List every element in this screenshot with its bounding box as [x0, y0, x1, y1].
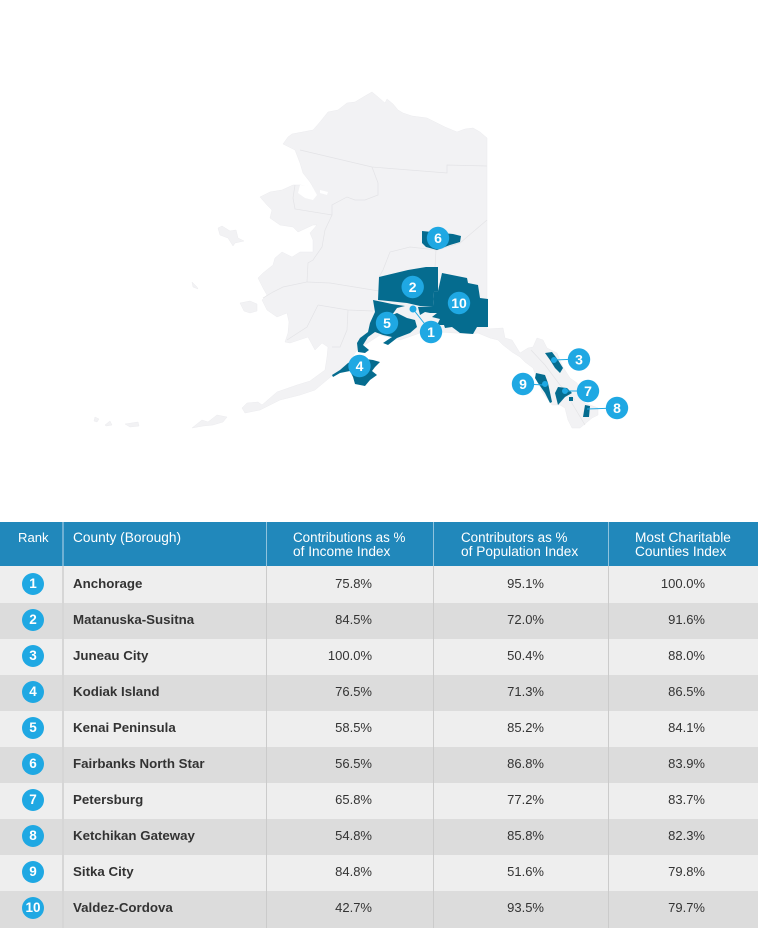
- column heading: county: County (Borough): [73, 530, 181, 545]
- pin 5: 5: [383, 315, 391, 331]
- highlighted boroughs: [332, 231, 590, 417]
- column heading: income index: Contributions as %: [293, 530, 405, 545]
- row 4: [0, 675, 758, 711]
- pin 4: 4: [356, 358, 364, 374]
- column heading: population index: of Population Index: [461, 544, 578, 559]
- row 5: 85.2%: [507, 720, 544, 735]
- row 6: 86.8%: [507, 756, 544, 771]
- row 10: 79.7%: [668, 900, 705, 915]
- column heading: population index: Contributors as %: [461, 530, 567, 545]
- pin 8: [606, 397, 628, 419]
- row 7: 7: [29, 792, 37, 807]
- row 2: 72.0%: [507, 612, 544, 627]
- row 5: 58.5%: [335, 720, 372, 735]
- column heading: population index: [461, 530, 578, 559]
- row 2: Matanuska-Susitna: [73, 612, 194, 627]
- row 10: 42.7%: [335, 900, 372, 915]
- pin 10: [448, 292, 470, 314]
- column heading: income index: of Income Index: [293, 544, 390, 559]
- row 8: 54.8%: [335, 828, 372, 843]
- row 5: Kenai Peninsula: [73, 720, 176, 735]
- row 10: 93.5%: [507, 900, 544, 915]
- pin 1: 1: [427, 324, 435, 340]
- pin 8: 8: [613, 400, 621, 416]
- borough: Valdez-Cordova: [418, 273, 488, 334]
- borough: Petersburg: [555, 387, 573, 405]
- borough: Sitka City: [535, 373, 552, 403]
- row 3: Juneau City: [73, 648, 148, 663]
- row 9: 84.8%: [335, 864, 372, 879]
- borough: Matanuska-Susitna: [378, 267, 438, 306]
- row 9: [0, 855, 758, 891]
- row 10: 10: [25, 900, 41, 915]
- pin 9: [512, 373, 534, 395]
- table header: [0, 522, 758, 566]
- row 1: 100.0%: [661, 576, 705, 591]
- pin 4: [348, 355, 371, 377]
- row 5: 84.1%: [668, 720, 705, 735]
- row 10: Valdez-Cordova: [73, 900, 173, 915]
- pin 7: 7: [584, 383, 592, 399]
- row 8: 85.8%: [507, 828, 544, 843]
- borough: Kodiak Island: [332, 358, 380, 386]
- borough: Juneau City: [545, 352, 563, 373]
- numbered map pins: [348, 227, 628, 419]
- row 1: 95.1%: [507, 576, 544, 591]
- row 7: 65.8%: [335, 792, 372, 807]
- borough: Kenai Peninsula: [357, 300, 417, 353]
- row 3: 88.0%: [668, 648, 705, 663]
- row 9: 51.6%: [507, 864, 544, 879]
- row 1: Anchorage: [73, 576, 142, 591]
- row 4: Kodiak Island: [73, 684, 159, 699]
- land: Alaska mainland and islands: [94, 92, 598, 428]
- column heading: charitable index: Most Charitable: [635, 530, 731, 545]
- pin 9: 9: [519, 376, 527, 392]
- row 2: 2: [29, 612, 37, 627]
- pin 5: [376, 312, 398, 334]
- row 10: [0, 891, 758, 928]
- pin 6: [427, 227, 449, 249]
- row 8: Ketchikan Gateway: [73, 828, 195, 843]
- pin 10: 10: [451, 295, 467, 311]
- row 3: 50.4%: [507, 648, 544, 663]
- row 8: [0, 819, 758, 855]
- row 2: 91.6%: [668, 612, 705, 627]
- row 7: [0, 783, 758, 819]
- row 4: 71.3%: [507, 684, 544, 699]
- pin 7: [577, 380, 599, 402]
- column heading: charitable index: Counties Index: [635, 544, 726, 559]
- row 2: [0, 603, 758, 639]
- pin 3: 3: [575, 352, 583, 368]
- row 4: 76.5%: [335, 684, 372, 699]
- row 7: Petersburg: [73, 792, 143, 807]
- column heading: rank: Rank: [18, 530, 49, 545]
- row 9: 9: [29, 864, 37, 879]
- row 5: 5: [29, 720, 37, 735]
- row 7: 83.7%: [668, 792, 705, 807]
- leader lines: [410, 306, 617, 409]
- row 7: 77.2%: [507, 792, 544, 807]
- row 1: 1: [29, 576, 37, 591]
- row 3: 3: [29, 648, 37, 663]
- row 3: 100.0%: [328, 648, 372, 663]
- row 5: [0, 711, 758, 747]
- pin 3: [568, 348, 590, 371]
- map of Alaska: [94, 92, 628, 428]
- row 6: 56.5%: [335, 756, 372, 771]
- pin 6: 6: [434, 230, 442, 246]
- row 1: [0, 566, 758, 603]
- pin 1: [420, 321, 442, 343]
- row 1: 75.8%: [335, 576, 372, 591]
- row 2: 84.5%: [335, 612, 372, 627]
- row 9: 79.8%: [668, 864, 705, 879]
- row 6: 83.9%: [668, 756, 705, 771]
- borough: Fairbanks North Star: [422, 231, 461, 250]
- row 6: Fairbanks North Star: [73, 756, 205, 771]
- row 4: 4: [29, 684, 37, 699]
- row 9: Sitka City: [73, 864, 134, 879]
- row 6: 6: [29, 756, 37, 771]
- rankings table: [0, 522, 758, 928]
- row 8: 82.3%: [668, 828, 705, 843]
- row 4: 86.5%: [668, 684, 705, 699]
- column heading: income index: [293, 530, 405, 559]
- borough boundary lines: [263, 150, 585, 425]
- row 3: [0, 639, 758, 675]
- row 6: [0, 747, 758, 783]
- inland water: Kotzebue Sound: [298, 185, 328, 200]
- row 8: 8: [29, 828, 37, 843]
- pin 2: [402, 276, 424, 298]
- column heading: charitable index: [635, 530, 731, 559]
- pin 2: 2: [409, 279, 417, 295]
- borough: Ketchikan Gateway: [583, 405, 590, 417]
